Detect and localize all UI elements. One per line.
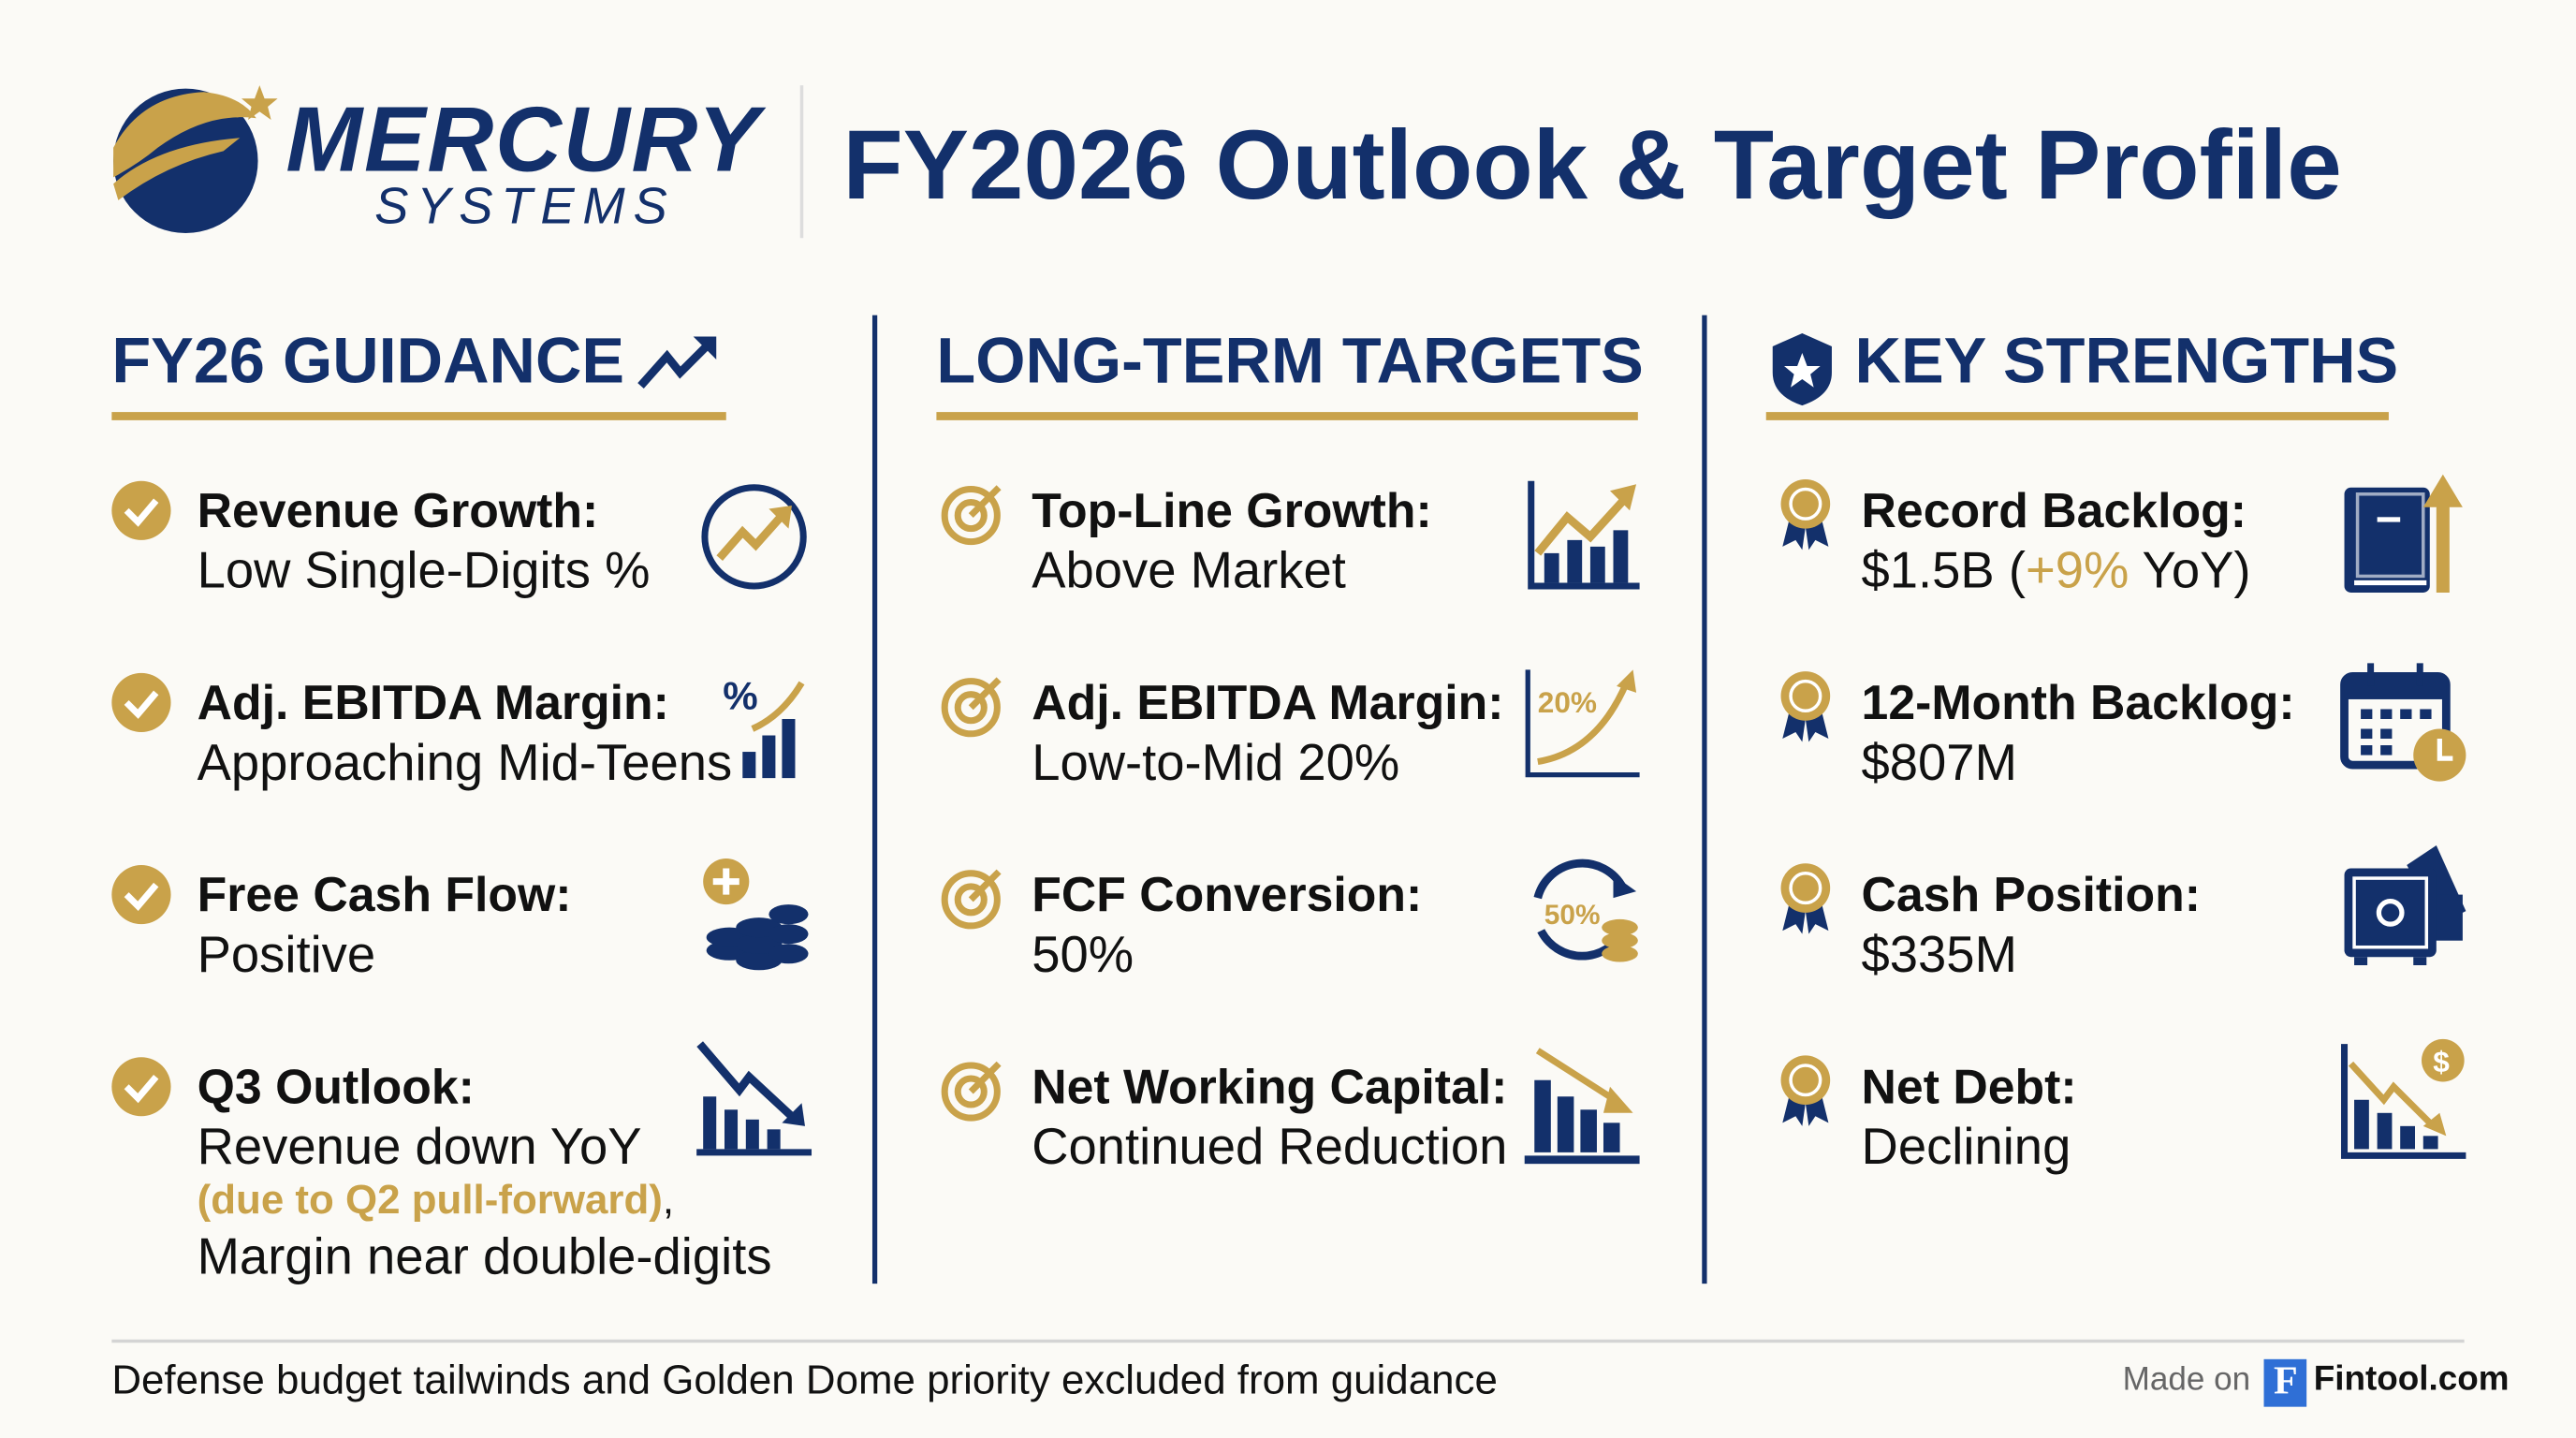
item: adj EBITDA margin: Adj. EBITDA Margin: xyxy=(198,676,669,730)
item: Q3 outlook: Margin near double-digits xyxy=(198,1228,772,1285)
item: top-line growth: Top-Line Growth: xyxy=(1032,484,1432,538)
item: free cash flow: Free Cash Flow: xyxy=(198,869,572,922)
item: record backlog: $1.5B (+9% YoY) xyxy=(1862,542,2250,599)
panel: FY26 guidance xyxy=(111,327,812,1285)
item: 12-month backlog xyxy=(1780,663,2466,791)
item: net debt: Net Debt: xyxy=(1862,1061,2077,1115)
item: revenue growth xyxy=(111,481,807,599)
panel: long-term targets xyxy=(936,327,1644,1175)
item: free cash flow: Positive xyxy=(198,926,375,983)
item: free cash flow xyxy=(111,858,809,983)
footer: made on fintool: F xyxy=(2274,1361,2298,1403)
item: adj EBITDA margin: Approaching Mid-Teens xyxy=(198,734,732,791)
title: FY2026 Outlook & Target Profile xyxy=(842,110,2342,220)
heading: FY26 guidance: FY26 GUIDANCE xyxy=(111,327,624,397)
heading: long-term targets: LONG-TERM TARGETS xyxy=(936,327,1644,397)
item: revenue growth: Low Single-Digits % xyxy=(198,542,650,599)
logo text: MERCURY xyxy=(285,87,761,190)
item: adj EBITDA margin: 20% xyxy=(1538,685,1597,719)
item: revenue growth: Revenue Growth: xyxy=(198,484,598,538)
panel: key strengths xyxy=(1765,327,2466,1175)
item: net working capital: Continued Reduction xyxy=(1032,1118,1507,1175)
item: record backlog xyxy=(1780,474,2463,599)
item: net working capital xyxy=(942,1048,1640,1175)
item: adj EBITDA margin: Adj. EBITDA Margin: xyxy=(1032,676,1504,730)
logo xyxy=(113,85,766,235)
item: 12-month backlog: $807M xyxy=(1862,734,2017,791)
item: Q3 outlook xyxy=(111,1041,812,1285)
footer: made on fintool: Made on Fintool.com xyxy=(2123,1360,2510,1398)
item: top-line growth: Above Market xyxy=(1032,542,1346,599)
footer note: Defense budget tailwinds and Golden Dome priority excluded from guidance xyxy=(111,1357,1498,1403)
item: cash position: $335M xyxy=(1862,926,2017,983)
item: adj EBITDA margin: % xyxy=(723,673,758,717)
logo mark xyxy=(113,85,277,233)
item: 12-month backlog: 12-Month Backlog: xyxy=(1862,676,2295,730)
logo: SYSTEMS xyxy=(374,177,676,235)
item: adj EBITDA margin xyxy=(111,672,805,791)
item: net debt xyxy=(1780,1039,2466,1175)
item: FCF conversion: FCF Conversion: xyxy=(1032,869,1422,922)
item: adj EBITDA margin xyxy=(942,669,1640,791)
item: Q3 outlook: Revenue down YoY xyxy=(198,1118,642,1175)
item: Q3 outlook: (due to Q2 pull-forward), xyxy=(198,1177,674,1223)
item: cash position xyxy=(1780,845,2466,983)
item: FCF conversion xyxy=(942,859,1638,983)
item: net debt: $ xyxy=(2433,1045,2450,1078)
item: FCF conversion: 50% xyxy=(1544,900,1600,931)
item: net debt: Declining xyxy=(1862,1118,2071,1175)
item: cash position: Cash Position: xyxy=(1862,869,2201,922)
item: record backlog: Record Backlog: xyxy=(1862,484,2247,538)
item: FCF conversion: 50% xyxy=(1032,926,1134,983)
heading: key strengths: KEY STRENGTHS xyxy=(1855,327,2398,397)
item: Q3 outlook: Q3 Outlook: xyxy=(198,1061,475,1115)
item: adj EBITDA margin: Low-to-Mid 20% xyxy=(1032,734,1399,791)
item: top-line growth xyxy=(942,481,1640,599)
item: net working capital: Net Working Capital: xyxy=(1032,1061,1507,1115)
